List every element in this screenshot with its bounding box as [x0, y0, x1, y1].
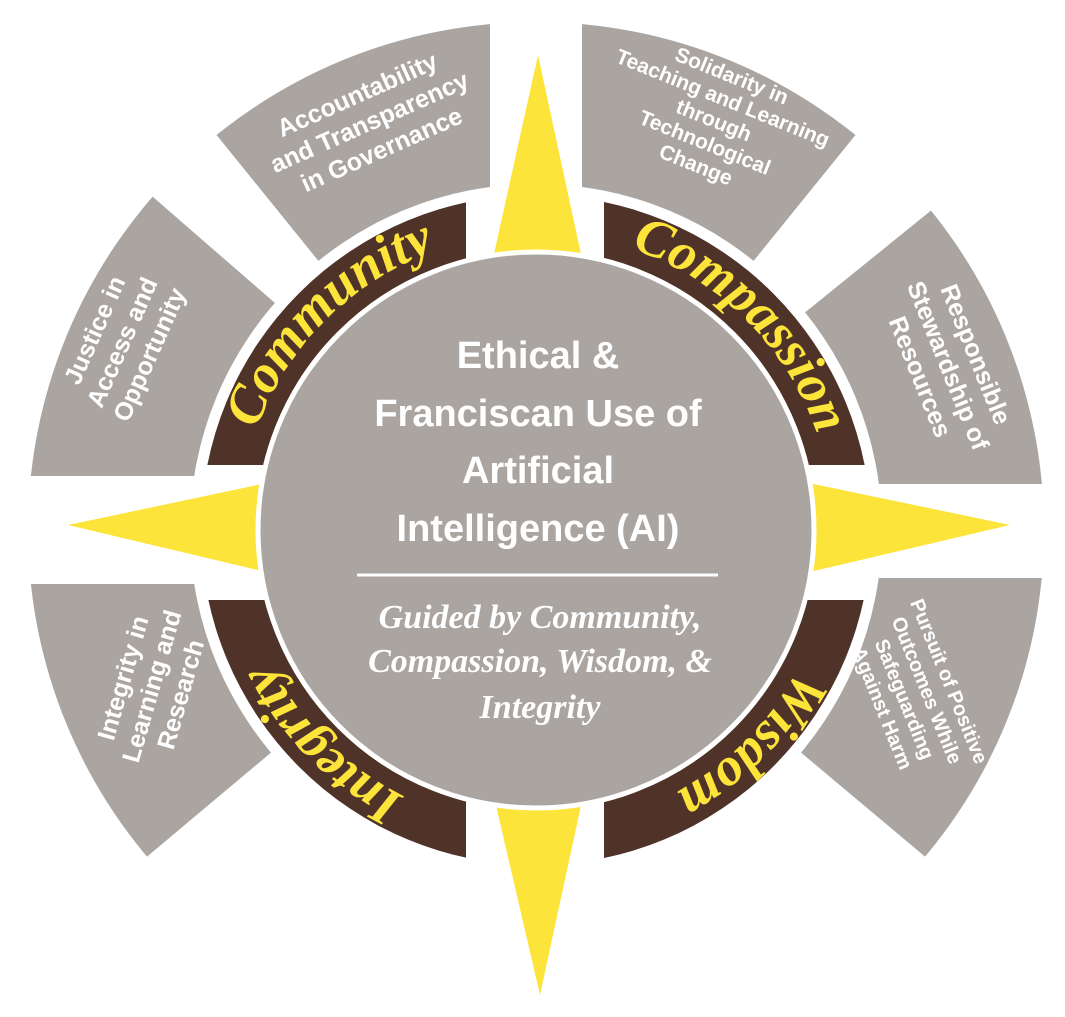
- segment: solidarity: Technological: [636, 106, 774, 180]
- center title: Intelligence (AI): [397, 508, 679, 550]
- segment: accountability: Accountability: [273, 47, 442, 143]
- center title: Artificial: [462, 450, 614, 492]
- segment: solidarity: [586, 23, 842, 219]
- segment: integrity: Research: [152, 637, 210, 753]
- ring labels: Community: [230, 228, 428, 424]
- segment: integrity: [88, 599, 216, 774]
- segment: responsible: Resources: [883, 312, 957, 442]
- segment: justice: Access and: [81, 273, 164, 412]
- subtitle: Guided by Community,: [379, 599, 701, 636]
- segment: accountability: [254, 39, 485, 206]
- segment: solidarity: through: [673, 95, 755, 146]
- subtitle: Compassion, Wisdom, &: [368, 643, 712, 680]
- segment: pursuit: Against Harm: [847, 644, 916, 773]
- segment: integrity: Learning and: [117, 607, 187, 766]
- segment: justice: Opportunity: [108, 284, 192, 426]
- center title: [374, 335, 702, 550]
- segment: pursuit: Safeguarding: [870, 636, 938, 763]
- center circle: [258, 252, 814, 808]
- segment: accountability: in Governance: [297, 102, 467, 198]
- ring labels: Wisdom: [678, 678, 828, 812]
- segment: solidarity: Teaching and Learning: [613, 45, 833, 152]
- segment: pursuit: Pursuit of Positive: [905, 596, 991, 767]
- segment: accountability: and Transparency: [266, 66, 473, 179]
- ring labels: [230, 222, 839, 824]
- outer gray segments: [30, 24, 1042, 856]
- segment: responsible: Stewardship of: [901, 277, 994, 455]
- segment: solidarity: Change: [656, 140, 736, 190]
- divider: [357, 574, 718, 576]
- segment: pursuit: Outcomes While: [887, 614, 966, 767]
- segment: responsible: Responsible: [935, 280, 1016, 429]
- segment: pursuit: [839, 596, 991, 794]
- subtitle: [368, 599, 712, 726]
- segment: responsible: [873, 266, 1022, 466]
- segment: integrity: Integrity in: [92, 613, 154, 743]
- ring labels: Compassion: [636, 222, 839, 432]
- brown ring quadrants: [198, 192, 874, 868]
- center title: Ethical &: [457, 335, 619, 377]
- segment: solidarity: Solidarity in: [672, 43, 792, 109]
- segment: justice: [53, 259, 192, 426]
- ring labels: Integrity: [248, 672, 404, 824]
- subtitle: Integrity: [479, 689, 601, 726]
- segment: justice: Justice in: [59, 272, 131, 389]
- center title: Franciscan Use of: [374, 393, 702, 435]
